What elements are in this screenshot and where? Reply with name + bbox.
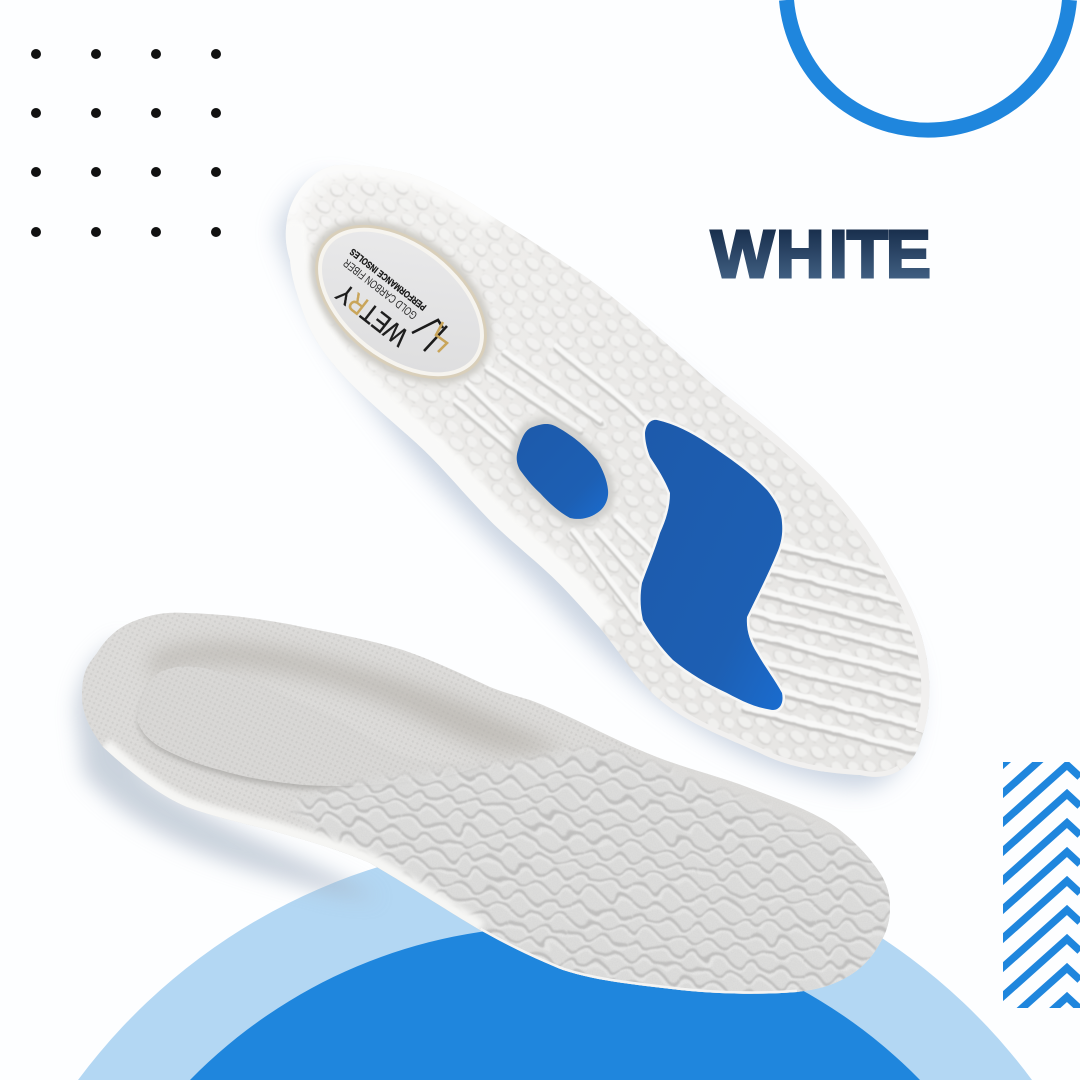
dot grid [31,49,221,237]
small blue pad [517,424,608,519]
insole: underside with blue pads [270,150,940,790]
tagline text: PERFORMANCE INSOLES [348,246,429,312]
heel cup [137,667,488,790]
forefoot texture [294,748,890,994]
decorative ring top right [786,0,1070,130]
heel logo badge [279,187,523,417]
large blue arch pad [641,420,783,710]
decorative light blue semicircle [78,840,1032,1080]
title: WHITE: WHITE [711,217,931,292]
side wall edge [103,747,480,930]
decorative blue semicircle [190,926,920,1080]
insole: top surface [76,610,900,1000]
logo mark [412,320,447,352]
outer rim highlight [480,930,797,994]
product text: GOLD CARBON FIBER [342,256,420,321]
arch side wall shading [150,642,565,755]
brand text: WETRY [331,278,414,352]
chevron pattern [1003,762,1080,1008]
